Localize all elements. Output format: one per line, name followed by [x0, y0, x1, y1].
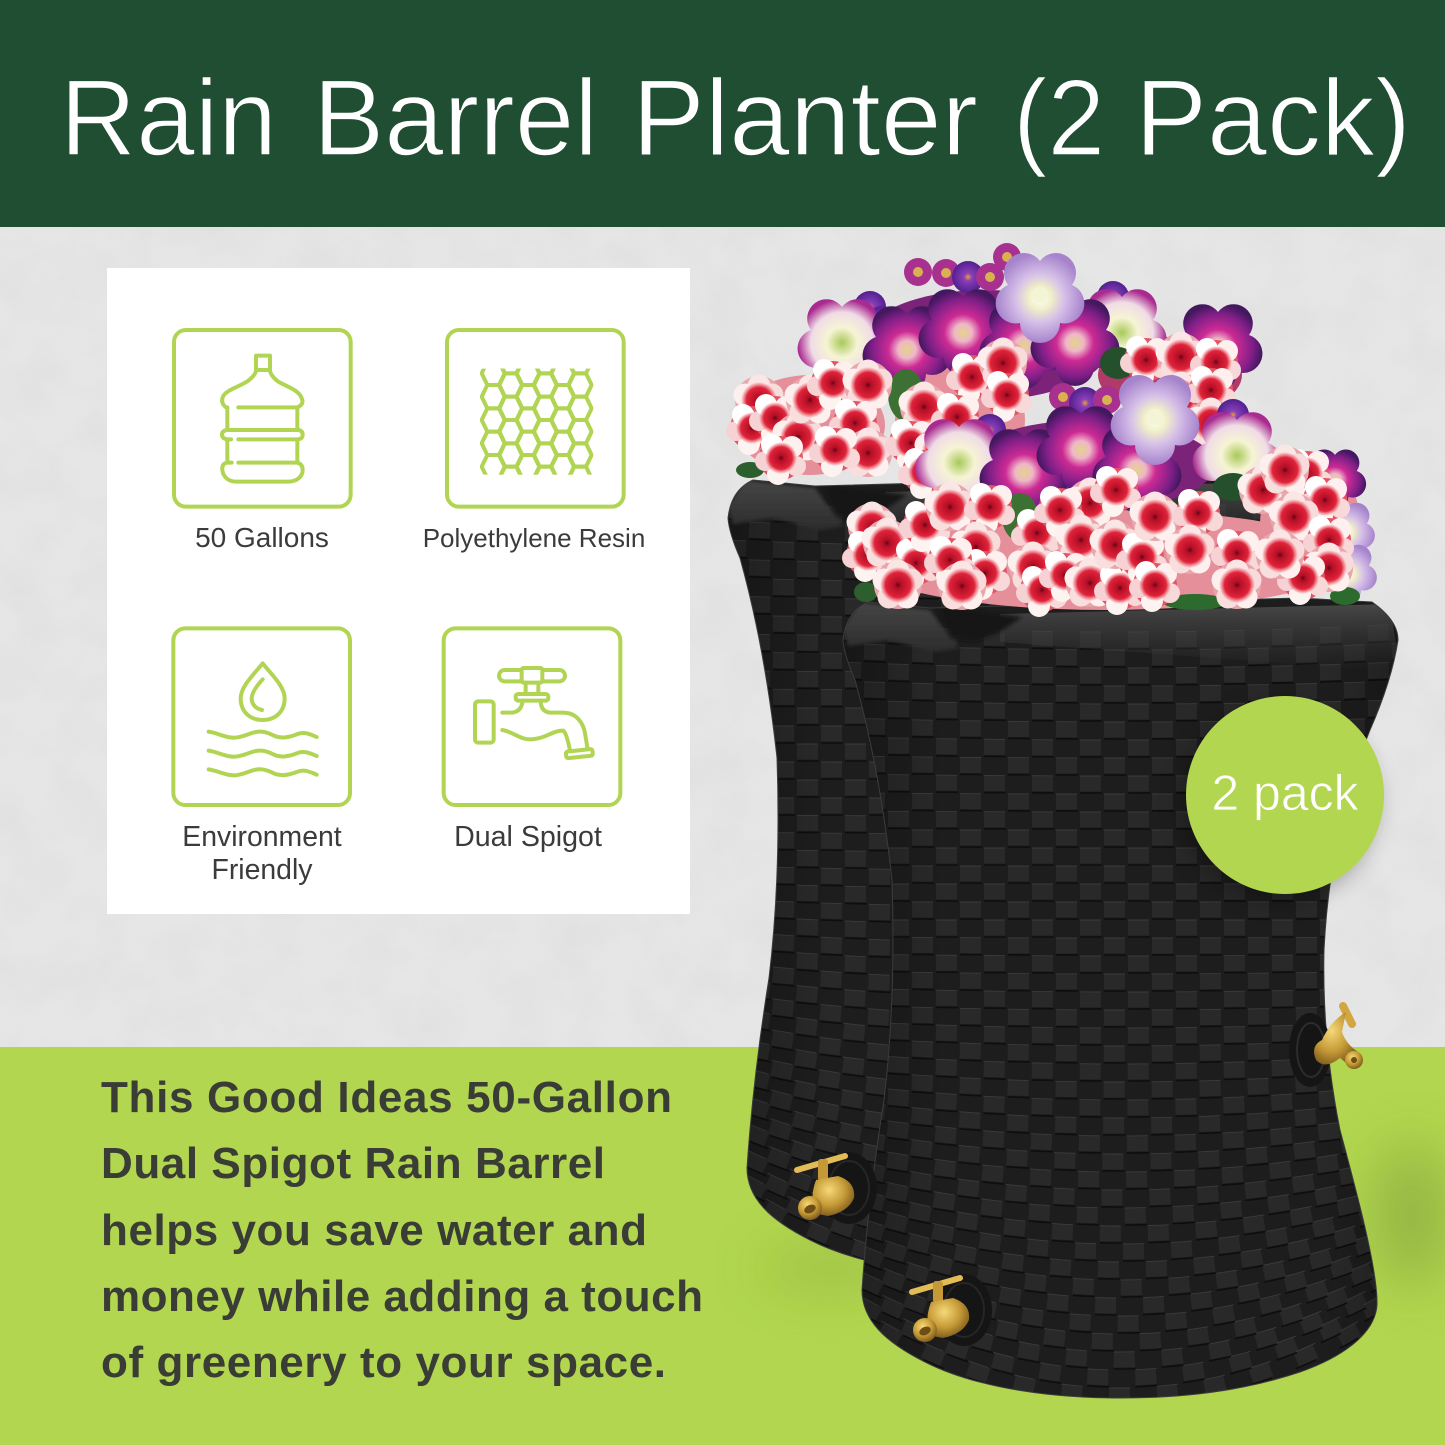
icon: spigot: [444, 628, 620, 805]
icon: hexagon mesh: [447, 330, 624, 507]
label: Polyethylene Resin: Polyethylene Resin: [423, 523, 645, 553]
spigot: back barrel: [797, 1152, 877, 1224]
back barrel: [715, 468, 1295, 1288]
title: Planter: [632, 57, 978, 179]
label: Environment Friendly: Environment: [182, 821, 342, 853]
icon: water drop and waves: [173, 628, 350, 805]
front flowers: [842, 375, 1377, 617]
badge: 2 pack: 2 pack: [1211, 765, 1359, 821]
label: Dual Spigot: Dual Spigot: [454, 821, 602, 853]
floor shadows: [760, 1143, 1445, 1288]
panel: features: [107, 268, 690, 914]
body text: [101, 1073, 703, 1387]
background: green floor band: [0, 1047, 1445, 1445]
title: Rain: [60, 57, 277, 179]
body text: of greenery to your space.: [101, 1338, 666, 1387]
product photo: two barrels with flowers: [726, 243, 1445, 1398]
back flowers: [726, 243, 1262, 499]
label: 50 Gallons: 50 Gallons: [195, 522, 329, 553]
spigot: front barrel left: [912, 1274, 992, 1346]
title: Pack): [1135, 57, 1411, 179]
background: grey plaster wall: [0, 227, 1445, 1048]
body text: Dual Spigot Rain Barrel: [101, 1139, 605, 1188]
body text: money while adding a touch: [101, 1272, 703, 1321]
title: (2: [1013, 57, 1105, 179]
body text: helps you save water and: [101, 1206, 647, 1255]
title: Barrel: [313, 57, 598, 179]
icon: water bottle: [174, 330, 351, 507]
front barrel: [830, 590, 1410, 1410]
label: Environment Friendly: Friendly: [212, 854, 312, 886]
header band: [0, 0, 1445, 227]
title: [60, 57, 1411, 179]
body text: This Good Ideas 50-Gallon: [101, 1073, 672, 1122]
feature icons: [171, 328, 626, 807]
label: Environment Friendly: [182, 821, 342, 886]
spigot: front barrel right: [1289, 1006, 1363, 1087]
badge: 2 pack: [1186, 696, 1384, 894]
